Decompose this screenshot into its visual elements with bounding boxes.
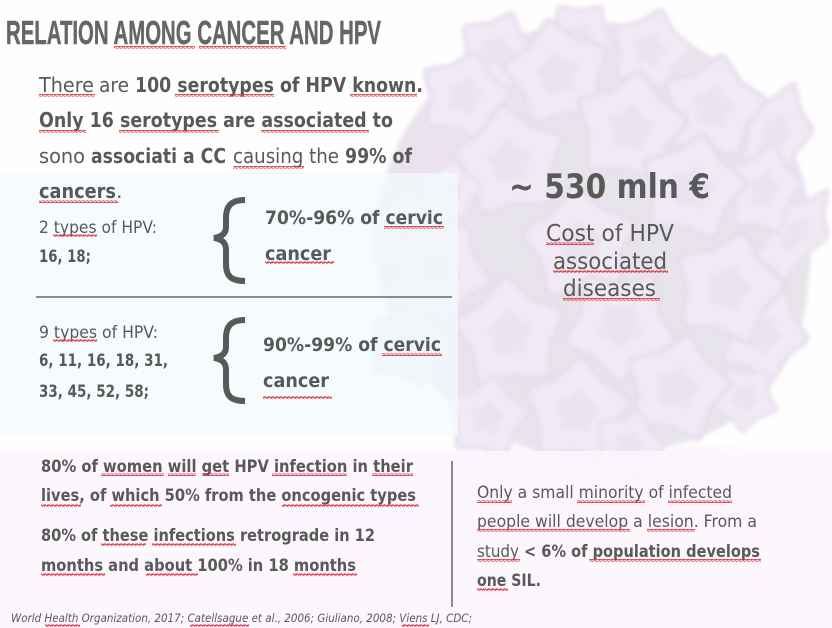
text block: minority develops lesion: one SIL. — [477, 571, 541, 590]
text block: HPV serotypes introduction — [38, 73, 423, 203]
text block: HPV serotypes introduction: cancers — [39, 179, 116, 203]
text block: HPV serotypes introduction: 99% of — [345, 144, 413, 168]
text block: HPV serotypes introduction: Only 16 serotypes are associated to — [39, 108, 393, 132]
callout: cost of HPV associated diseases: ~ 530 mln € — [509, 167, 710, 207]
text block: 9 types of HPV: 33, 45, 52, 58; — [39, 382, 149, 401]
text block: HPV serotypes introduction: causing the — [233, 144, 339, 168]
text block: minority develops lesion — [477, 483, 761, 591]
text block: minority develops lesion: study — [477, 542, 519, 562]
callout: cost of HPV associated diseases — [509, 167, 710, 302]
text block: HPV serotypes introduction: There — [38, 73, 94, 97]
panel: pink statistics background — [0, 451, 832, 628]
text block: HPV infection statistics: 80% of women will get HPV infection in their — [41, 457, 414, 476]
text block: HPV serotypes introduction: associati a CC — [91, 144, 226, 168]
text block: 2 types of HPV: 2 types of HPV: — [39, 218, 157, 238]
callout: cost of HPV associated diseases: Cost of HPV — [546, 221, 674, 247]
text block: HPV serotypes introduction: 100 serotypes of HPV known. — [135, 73, 423, 97]
text block: HPV infection statistics: months and about 100% in 18 months — [41, 556, 356, 575]
callout: cost of HPV associated diseases: diseases — [563, 276, 656, 302]
text block: minority develops lesion: people will develop a lesion. From a — [477, 512, 757, 532]
text block: HPV serotypes introduction: are — [99, 73, 129, 97]
panel: blue HPV types background — [0, 173, 458, 435]
text block: 2 types of HPV: 16, 18; — [39, 247, 91, 266]
text block: sources: World Health Organization, 2017; Catellsague et al., 2006; Giuliano, 2008; Viens LJ, CDC; — [11, 611, 472, 625]
text block: 9 types of HPV: 9 types of HPV: — [39, 323, 158, 343]
text block: HPV serotypes introduction: . — [116, 179, 123, 203]
callout: 70%-96% of cervic cancer: cancer — [265, 243, 332, 265]
text block: minority develops lesion: < 6% of population develops — [524, 542, 760, 561]
text block: HPV infection statistics — [41, 457, 419, 576]
text block: HPV infection statistics: lives, of which 50% from the oncogenic types — [41, 486, 416, 505]
callout: 90%-99% of cervic cancer: cancer — [263, 370, 330, 392]
text block: 9 types of HPV: 6, 11, 16, 18, 31, — [39, 351, 168, 370]
text block: HPV serotypes introduction: sono — [39, 144, 85, 168]
callout: 70%-96% of cervic cancer — [265, 207, 444, 265]
title: RELATION AMONG CANCER AND HPV — [6, 14, 381, 51]
callout: 90%-99% of cervic cancer: 90%-99% of cervic — [263, 334, 441, 356]
text block: 2 types of HPV — [39, 218, 157, 266]
icon: brace for 2 types — [214, 200, 245, 281]
text block: minority develops lesion: Only a small minority of infected — [477, 483, 732, 503]
callout: 70%-96% of cervic cancer: 70%-96% of cervic — [265, 207, 443, 229]
callout: cost of HPV associated diseases: associated — [553, 249, 667, 275]
text block: 9 types of HPV — [39, 323, 168, 401]
callout: 90%-99% of cervic cancer — [263, 334, 442, 399]
icon: brace for 9 types — [214, 320, 245, 401]
text block: HPV infection statistics: 80% of these infections retrograde in 12 — [41, 526, 375, 545]
title — [6, 14, 381, 51]
illustration: HPV virus particle — [366, 0, 832, 510]
